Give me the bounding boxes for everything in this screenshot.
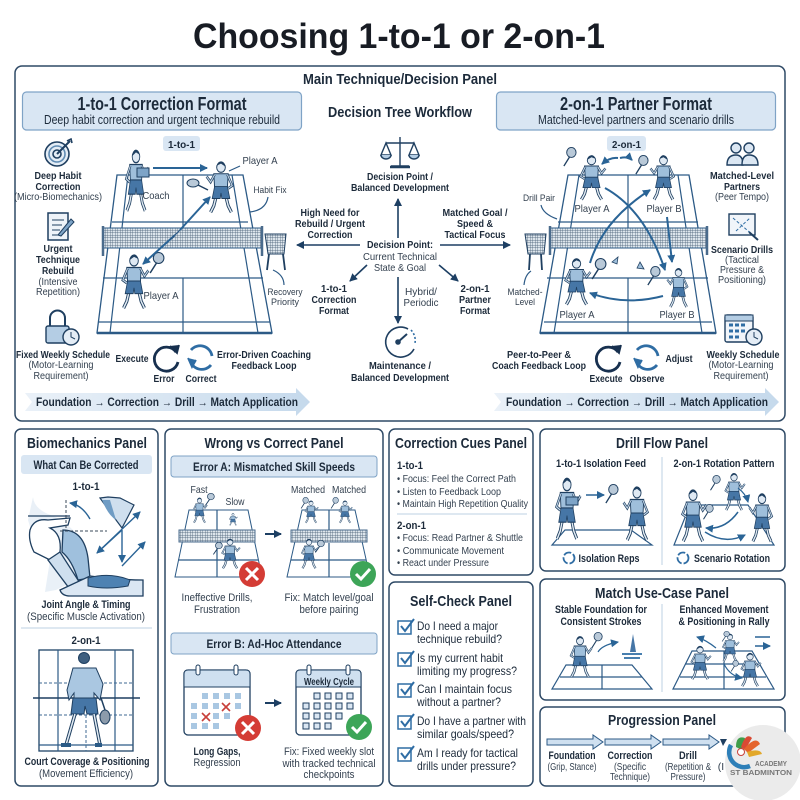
feedback loop: 2-on-1: Peer-to-Peer & — [507, 349, 571, 361]
text: scenario drills: Pressure & — [720, 264, 764, 276]
list: 2-on-1: • Focus: Read Partner & Shuttle — [397, 532, 523, 544]
banner: 1-to-1 format: 1-to-1 Correction Format — [78, 94, 246, 114]
outcome: 1-to-1 — [312, 283, 356, 317]
text: weekly schedule: Requirement) — [714, 370, 768, 382]
flow arrow left: Foundation → Correction → Drill → Match Application — [36, 397, 298, 409]
tag 1-to-1 — [163, 136, 200, 151]
panel: self-check — [389, 582, 533, 786]
text: deep habit correction — [14, 170, 102, 203]
text: weekly schedule: (Motor-Learning — [708, 359, 774, 371]
arrow — [265, 533, 281, 535]
right icons column — [706, 143, 780, 382]
icon: shuttle basket — [265, 234, 286, 270]
use case: foundation — [552, 604, 652, 689]
panel: main technique/decision — [14, 66, 785, 421]
branch: left high need: Rebuild / Urgent — [295, 218, 365, 230]
step: drill — [663, 735, 719, 783]
labels on court: Coach — [142, 190, 170, 202]
court: 2-on-1 diagram: Drill Pair — [523, 193, 555, 204]
step: correction: Technique) — [610, 771, 650, 783]
icon: red x badge — [239, 561, 265, 587]
icon: gauge — [386, 327, 415, 357]
outcome: 1-to-1: Format — [319, 305, 349, 317]
feedback loop: 2-on-1: Coach Feedback Loop — [492, 360, 586, 372]
icon: shuttle basket — [525, 234, 546, 270]
branch: left high need: Correction — [308, 229, 352, 241]
heading: Match Use-Case Panel — [595, 585, 729, 602]
step: foundation: Foundation — [548, 750, 596, 762]
correct court: Matched — [332, 484, 366, 496]
panel: wrong vs correct: with tracked technical — [282, 758, 376, 770]
icon: calendar and clock — [725, 315, 762, 345]
logo: academy badminton: ACADEMY — [755, 761, 787, 768]
branch: left high need: High Need for — [300, 207, 360, 219]
court: 2-on-1 diagram: 2-on-1 — [612, 139, 641, 151]
player A top figure — [207, 161, 232, 212]
text: urgent technique rebuild: Technique — [36, 254, 80, 266]
heading: Drill Flow Panel — [616, 435, 708, 452]
checklist: without a partner? — [416, 695, 501, 709]
branch: right matched goal: Tactical Focus — [444, 229, 506, 241]
list: 1-to-1: • Listen to Feedback Loop — [397, 486, 501, 498]
use case: rally — [673, 604, 774, 689]
court labels: Player A — [574, 203, 610, 215]
checklist: Do I have a partner with — [417, 714, 526, 728]
text: matched-level partners — [710, 170, 774, 203]
anatomy illustration — [28, 497, 145, 596]
panel: drill flow — [540, 429, 785, 571]
node: maintenance: Maintenance / — [369, 360, 431, 372]
step: foundation — [547, 735, 603, 773]
icon: two partners — [727, 143, 758, 165]
text: deep habit correction: (Micro-Biomechanics) — [14, 191, 102, 203]
icon: green check badge — [350, 561, 376, 587]
feedback loop: 1-to-1 — [116, 345, 311, 385]
sub-drill: rotation — [674, 458, 775, 565]
court: 2-on-1 diagram: Player B — [660, 309, 694, 321]
text: urgent technique rebuild — [36, 243, 80, 298]
captions error A — [182, 592, 252, 616]
checklist: limiting my progress? — [417, 664, 517, 678]
checklist: Do I need a major — [417, 619, 498, 633]
feedback loop: 1-to-1: Execute — [116, 353, 149, 365]
subheading band: What Can Be Corrected — [34, 460, 138, 472]
hybrid label: Hybrid/ — [405, 286, 437, 298]
step: foundation: (Grip, Stance) — [548, 761, 596, 773]
sub-drill: isolation: 1-to-1 Isolation Feed — [556, 458, 646, 470]
subheading band — [21, 455, 152, 474]
hybrid label: Periodic — [404, 297, 438, 309]
step: correction — [605, 735, 661, 783]
checklist: similar goals/speed? — [417, 727, 514, 741]
list: 2-on-1 — [397, 520, 523, 569]
court: 1-to-1 diagram: Priority — [271, 297, 299, 308]
panel: biomechanics — [15, 429, 158, 786]
player A top — [581, 155, 605, 200]
checklist: Am I ready for tactical — [417, 746, 518, 760]
icon: green check badge — [346, 714, 372, 740]
sub-drill: rotation: 2-on-1 Rotation Pattern — [674, 458, 775, 470]
node: centre — [363, 239, 437, 274]
icon: document and pen — [48, 213, 74, 240]
racket bottom — [150, 252, 164, 273]
text: weekly schedule — [706, 349, 780, 382]
band: error B: Error B: Ad-Hoc Attendance — [206, 637, 342, 651]
panel: correction cues — [389, 429, 533, 575]
icon: target — [45, 139, 72, 166]
arrows — [620, 157, 632, 160]
calendar: weekly: Weekly Cycle — [304, 676, 354, 688]
text: fixed weekly schedule: (Motor-Learning — [28, 359, 94, 371]
correct court — [287, 484, 370, 577]
captions error A: Frustration — [194, 604, 240, 616]
branch: left high need — [295, 207, 365, 241]
panel: wrong vs correct: Fix: Match level/goal — [284, 592, 374, 604]
panel: wrong vs correct: checkpoints — [304, 769, 355, 781]
court: 1-to-1 diagram — [97, 136, 303, 333]
icon: padlock and clock — [46, 310, 79, 345]
text: scenario drills: Positioning) — [718, 274, 766, 286]
use case: rally: Enhanced Movement — [680, 604, 769, 616]
icon: red x badge — [235, 715, 261, 741]
wrong court: Fast — [190, 484, 208, 496]
icon: blue loop — [634, 346, 658, 369]
icon: dark loop — [596, 345, 621, 371]
icon: dark loop — [154, 345, 179, 371]
wrong court: Slow — [226, 496, 245, 508]
text: scenario drills: (Tactical — [725, 254, 759, 266]
node: top: Decision Point / — [367, 171, 433, 183]
captions error B: Long Gaps, — [194, 746, 240, 758]
feedback loop: 1-to-1: Error-Driven Coaching — [217, 349, 311, 361]
caption: (Movement Efficiency) — [39, 768, 133, 780]
arrow — [265, 702, 281, 704]
wrong court — [175, 484, 262, 577]
logo: academy badminton — [725, 725, 800, 800]
node: top — [351, 171, 449, 194]
caption: Court Coverage & Positioning — [24, 756, 150, 768]
banner: 1-to-1 format — [22, 92, 302, 130]
flow arrow left — [25, 388, 310, 416]
use case: foundation: Stable Foundation for — [555, 604, 648, 616]
main panel heading: Main Technique/Decision Panel — [303, 71, 497, 88]
banner: 2-on-1 format: 2-on-1 Partner Format — [560, 94, 712, 114]
feedback loop: 1-to-1: Correct — [186, 373, 217, 385]
flow arrow right: Foundation → Correction → Drill → Match Application — [506, 397, 768, 409]
title: Choosing 1-to-1 or 2-on-1 — [193, 17, 605, 56]
sub-drill: rotation: Scenario Rotation — [694, 553, 770, 565]
banner: 2-on-1 format — [496, 92, 776, 130]
step: correction: (Specific — [614, 761, 646, 773]
feedback loop: 1-to-1: Feedback Loop — [232, 360, 296, 372]
panel: match use-case — [540, 579, 785, 700]
text: matched-level partners: Partners — [724, 181, 760, 193]
list: 1-to-1: • Maintain High Repetition Quality — [397, 498, 529, 510]
panel: wrong vs correct — [165, 429, 383, 786]
panel: biomechanics: 2-on-1 — [72, 635, 100, 647]
text: urgent technique rebuild: Rebuild — [42, 265, 74, 277]
heading: Wrong vs Correct Panel — [204, 435, 344, 452]
court: 1-to-1 diagram: Player A — [242, 155, 278, 167]
feedback loop: 2-on-1: Execute — [590, 373, 623, 385]
outcome: 2-on-1: Format — [460, 305, 490, 317]
checklist: technique rebuild? — [417, 632, 502, 646]
partial next step: (I — [718, 761, 724, 773]
net — [103, 228, 262, 248]
calendar: weekly — [296, 665, 361, 735]
hybrid label — [404, 286, 438, 309]
court: 2-on-1 diagram — [508, 136, 716, 333]
heading: Biomechanics Panel — [27, 435, 147, 452]
feedback loop: 1-to-1: Error — [154, 373, 174, 385]
partial next step — [718, 739, 727, 773]
band: error B — [171, 633, 377, 654]
step: drill: Drill — [679, 750, 697, 762]
court: 1-to-1 diagram: Recovery — [268, 287, 303, 298]
player A bottom figure — [123, 254, 148, 308]
coach figure — [126, 150, 149, 211]
text: deep habit correction: Correction — [36, 181, 80, 193]
list: 1-to-1: • Focus: Feel the Correct Path — [397, 473, 516, 485]
branch: right matched goal: Speed & — [457, 218, 493, 230]
sub-drill: isolation: Isolation Reps — [578, 553, 640, 565]
text: urgent technique rebuild: Repetition) — [36, 286, 80, 298]
flow arrow right — [494, 388, 779, 416]
outcome: 2-on-1 — [459, 283, 491, 317]
court: 1-to-1 diagram: 1-to-1 — [168, 139, 195, 151]
court: 1-to-1 diagram: Habit Fix — [254, 185, 287, 196]
captions error B: Regression — [194, 757, 240, 769]
node: centre: Current Technical — [363, 251, 437, 263]
icon: scenario drills — [729, 214, 758, 240]
court coverage diagram — [33, 650, 140, 751]
panel: wrong vs correct: before pairing — [300, 604, 358, 616]
tag 2-on-1 — [607, 136, 646, 151]
arrows on court — [153, 167, 207, 169]
node: centre: State & Goal — [374, 262, 426, 274]
panel: progression — [540, 707, 785, 786]
list: 1-to-1: 1-to-1 — [397, 460, 423, 472]
node: centre: Decision Point: — [367, 239, 433, 251]
feedback loop: 2-on-1: Observe — [630, 373, 665, 385]
text: matched-level partners: (Peer Tempo) — [715, 191, 769, 203]
racket top — [187, 179, 208, 190]
branch: right matched goal — [442, 207, 508, 241]
caption: Joint Angle & Timing — [42, 599, 130, 611]
heading: Decision Tree Workflow — [328, 104, 472, 121]
text: fixed weekly schedule: Fixed Weekly Schedule — [16, 349, 110, 361]
heading: Progression Panel — [608, 712, 716, 729]
text: weekly schedule: Weekly Schedule — [706, 349, 780, 361]
caption: (Specific Muscle Activation) — [27, 611, 145, 623]
court: 2-on-1 diagram: Player B — [646, 203, 682, 215]
feedback loop: 2-on-1 — [492, 345, 693, 385]
panel: wrong vs correct: Fix: Fixed weekly slot — [284, 746, 374, 758]
decision tree — [295, 104, 510, 384]
feedback loop: 2-on-1: Adjust — [666, 353, 693, 365]
court: 2-on-1 diagram: Matched- — [508, 287, 542, 298]
arrow up/down/left/right — [397, 199, 399, 238]
calendar: ad-hoc — [184, 665, 250, 735]
checklist: Can I maintain focus — [417, 682, 512, 696]
node: maintenance — [351, 360, 449, 384]
checklist — [398, 619, 526, 773]
checklist: drills under pressure? — [417, 759, 516, 773]
shuttles — [612, 257, 618, 264]
step: correction: Correction — [608, 750, 653, 762]
text: scenario drills — [711, 244, 773, 286]
list: 1-to-1 — [397, 460, 529, 510]
heading: Correction Cues Panel — [395, 435, 527, 452]
outcome: 1-to-1: 1-to-1 — [321, 283, 347, 295]
outcome: 1-to-1: Correction — [312, 294, 356, 306]
player B top — [650, 155, 674, 200]
text: scenario drills: Scenario Drills — [711, 244, 773, 256]
checklist: Is my current habit — [417, 651, 504, 665]
icon: blue loop — [188, 346, 212, 369]
court: 2-on-1 diagram: Level — [515, 297, 535, 308]
outcome: 2-on-1: 2-on-1 — [460, 283, 490, 295]
band: error A — [171, 456, 377, 477]
correct court: Matched — [291, 484, 325, 496]
band: error A: Error A: Mismatched Skill Speeds — [193, 460, 355, 474]
player A bottom — [566, 258, 590, 304]
net — [550, 228, 707, 248]
outcome: 2-on-1: Partner — [459, 294, 491, 306]
court: 1-to-1 diagram: Player A — [144, 290, 178, 302]
node: maintenance: Balanced Development — [351, 372, 449, 384]
step: drill: Pressure) — [670, 771, 706, 783]
use case: rally: & Positioning in Rally — [678, 616, 770, 628]
logo: academy badminton: ST BADMINTON — [730, 768, 792, 777]
banner: 2-on-1 format: Matched-level partners and scenario drills — [538, 113, 734, 127]
caption — [27, 599, 145, 623]
heading: Self-Check Panel — [410, 593, 512, 610]
player B bottom — [667, 268, 687, 307]
text: urgent technique rebuild: Urgent — [44, 243, 73, 255]
left icons column — [14, 139, 110, 382]
list: 2-on-1: • Communicate Movement — [397, 545, 504, 557]
panel: biomechanics: 1-to-1 — [72, 481, 100, 493]
step: drill: (Repetition & — [665, 761, 711, 773]
captions error A: Ineffective Drills, — [182, 592, 252, 604]
sub-drill: isolation — [552, 458, 652, 565]
text: urgent technique rebuild: (Intensive — [38, 276, 78, 288]
text: fixed weekly schedule: Requirement) — [34, 370, 88, 382]
captions error B — [194, 746, 240, 769]
branch: right matched goal: Matched Goal / — [442, 207, 508, 219]
court: 2-on-1 diagram: Player A — [560, 309, 594, 321]
list: 2-on-1: 2-on-1 — [397, 520, 426, 532]
text: fixed weekly schedule — [16, 349, 110, 382]
node: top: Balanced Development — [351, 182, 449, 194]
text: matched-level partners: Matched-Level — [710, 170, 774, 182]
caption — [24, 756, 150, 780]
banner: 1-to-1 format: Deep habit correction and urgent technique rebuild — [44, 113, 280, 127]
icon: scales — [381, 137, 419, 167]
list: 2-on-1: • React under Pressure — [397, 557, 489, 569]
text: deep habit correction: Deep Habit — [34, 170, 82, 182]
use case: foundation: Consistent Strokes — [560, 616, 642, 628]
